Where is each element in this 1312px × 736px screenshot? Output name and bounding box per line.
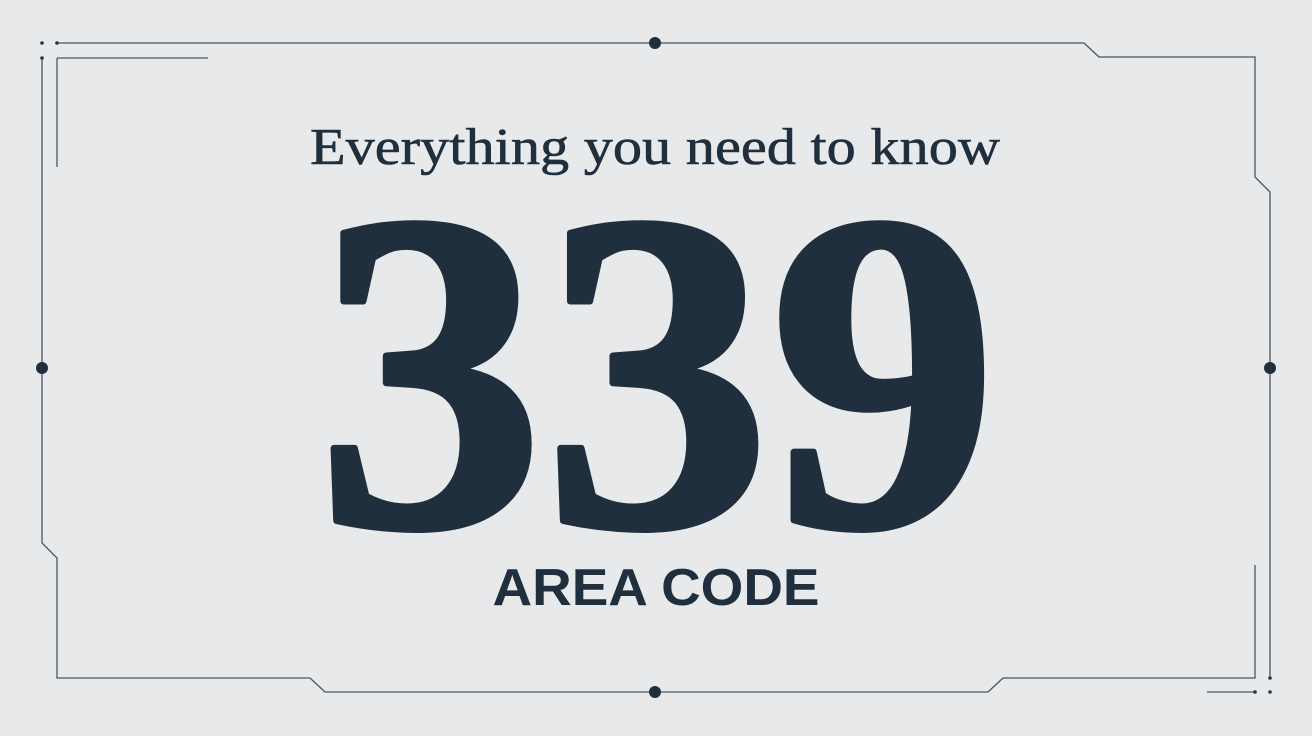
subtitle: AREA CODE: AREA CODE [492, 559, 820, 617]
big number 339: 339 [317, 121, 997, 624]
title: Everything you need to know: Everything you need to know [310, 119, 1000, 176]
